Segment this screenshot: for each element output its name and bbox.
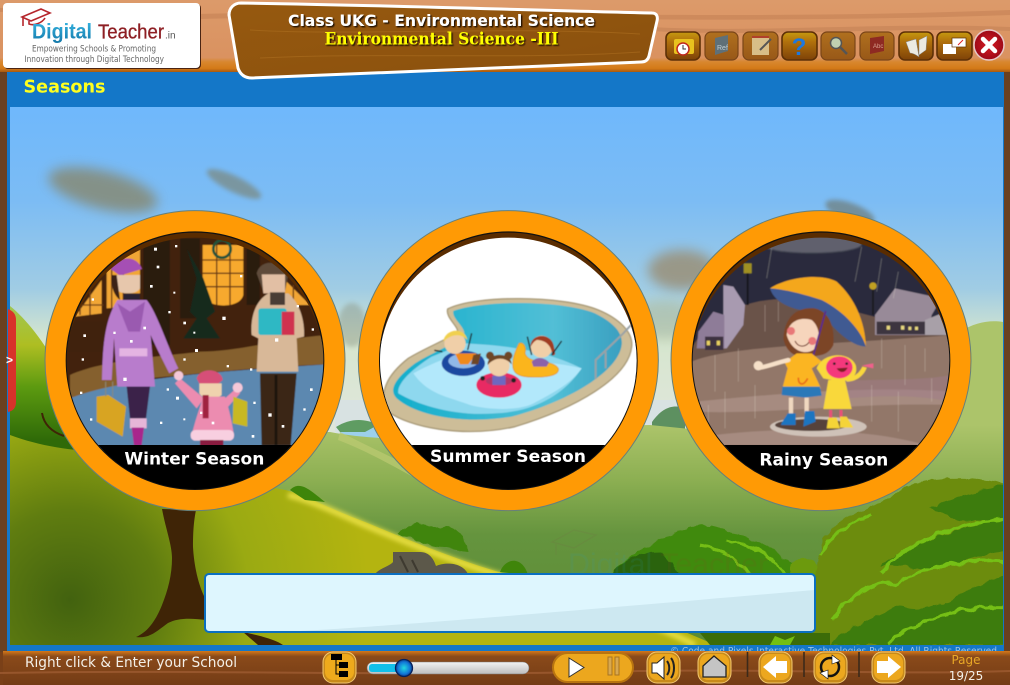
summer label: Summer Season xyxy=(430,447,586,467)
button: reference book: Ref xyxy=(717,45,728,52)
button: home xyxy=(698,652,731,683)
logo wordmark: .in xyxy=(165,30,176,42)
subject subtitle: Environmental Science -III xyxy=(324,30,559,50)
winter father xyxy=(251,263,304,446)
logo wordmark: Teacher xyxy=(98,22,164,44)
center bush xyxy=(610,525,820,580)
button: help: ? xyxy=(792,34,806,61)
page counter: 19/25 xyxy=(949,669,983,683)
control separators xyxy=(748,652,859,677)
progress slider xyxy=(367,660,529,676)
child in duck ring xyxy=(513,336,562,377)
copyright line: © Code and Pixels Interactive Technologies Pvt. Ltd. All Rights Reserved xyxy=(670,646,997,657)
heading: Seasons: Seasons xyxy=(24,77,106,98)
button: close xyxy=(974,30,1004,60)
icon: graduation cap xyxy=(22,9,50,26)
season card: rainy xyxy=(671,211,971,511)
watermark: Digital Teacher xyxy=(568,548,768,581)
summer orange ring xyxy=(358,211,658,511)
landscape background scene xyxy=(10,107,1006,650)
title plaque xyxy=(229,3,657,78)
logo tagline: Innovation through Digital Technology xyxy=(24,55,164,65)
summer illustration xyxy=(378,235,642,498)
child in blue ring xyxy=(434,331,485,376)
bottom control bar xyxy=(0,651,1010,685)
button: help xyxy=(782,32,817,61)
logo wordmark: Digital xyxy=(32,20,92,44)
button: next xyxy=(872,652,905,683)
button: clock folder xyxy=(666,32,700,60)
season card: summer xyxy=(358,211,658,511)
winter label: Winter Season xyxy=(124,449,264,469)
logo panel xyxy=(3,3,201,69)
button: window resize xyxy=(937,32,972,60)
button: previous xyxy=(759,652,792,683)
button: sound xyxy=(647,652,680,683)
course title: Class UKG - Environmental Science xyxy=(288,11,595,30)
left side tab: > xyxy=(6,353,13,367)
button: search xyxy=(821,32,855,60)
left side tab xyxy=(6,309,16,412)
child in pink ring xyxy=(476,352,522,398)
right houses xyxy=(869,282,952,335)
winter illustration xyxy=(63,235,330,498)
winter snowflakes xyxy=(80,245,314,438)
button: replay xyxy=(814,652,847,683)
rain streaks xyxy=(708,247,932,432)
top wooden bar xyxy=(0,0,1010,72)
button: dictionary xyxy=(860,32,894,60)
empty caption box xyxy=(205,574,815,632)
rainy orange ring xyxy=(671,211,971,511)
winter child xyxy=(174,370,247,447)
page counter: Page xyxy=(951,653,981,667)
button: open book xyxy=(899,32,933,60)
rainy label: Rainy Season xyxy=(759,451,888,471)
page counter xyxy=(949,653,983,683)
button: notepad xyxy=(743,32,778,60)
winter orange ring xyxy=(45,211,345,511)
button: reference book xyxy=(705,32,738,60)
right bush xyxy=(812,478,1006,650)
left houses xyxy=(697,263,752,350)
rainy illustration xyxy=(688,235,955,498)
logo tagline xyxy=(24,44,164,65)
button: dictionary: Abc xyxy=(873,44,883,50)
watermark xyxy=(552,530,768,581)
play and pause control xyxy=(553,653,633,682)
logo tagline: Empowering Schools & Promoting xyxy=(32,44,156,54)
logo wordmark xyxy=(32,20,176,44)
school prompt text: Right click & Enter your School xyxy=(25,655,237,671)
season card: winter xyxy=(45,211,345,511)
chick in yellow raincoat xyxy=(817,355,873,428)
winter mother xyxy=(97,258,178,446)
swimming pool xyxy=(384,299,632,431)
button: contents tree xyxy=(323,652,356,683)
toolbar icons xyxy=(666,30,1004,61)
girl with umbrella xyxy=(754,277,866,427)
